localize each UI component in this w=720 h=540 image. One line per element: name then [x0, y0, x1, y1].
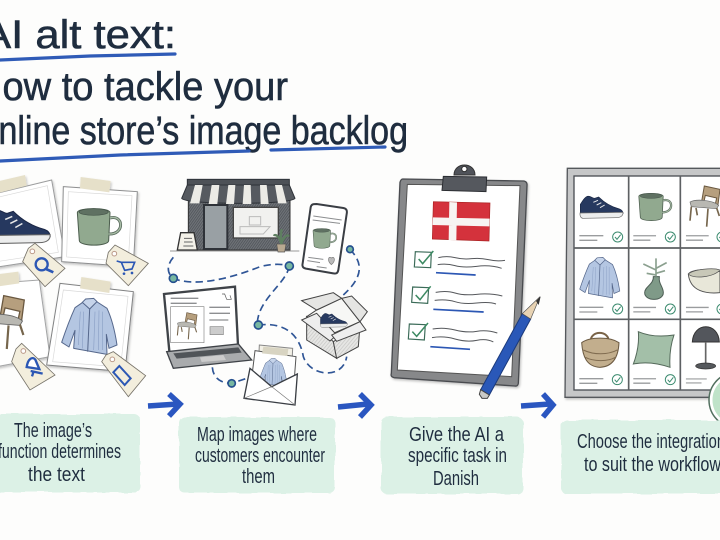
panel: customer touchpoints map	[164, 179, 367, 405]
caption lines and check marks	[579, 232, 720, 385]
icon: pencil	[479, 296, 541, 398]
dashed journey path	[168, 249, 359, 383]
caption: step three: Danish	[433, 468, 479, 490]
icon: open box	[302, 293, 367, 358]
checklist item three	[408, 323, 497, 349]
product: mug	[639, 193, 671, 221]
product: chair	[690, 186, 720, 227]
tag: cart icon	[106, 245, 148, 286]
arrow: step three to four	[521, 394, 553, 417]
caption: step two: them	[242, 466, 275, 488]
clipboard	[391, 179, 527, 386]
product: lamp	[692, 327, 719, 369]
product: shoe	[580, 196, 623, 218]
clip	[442, 165, 487, 192]
photo: mug	[62, 177, 137, 267]
icon: phone	[302, 204, 347, 274]
caption: step four	[561, 420, 720, 494]
arrow: step two to three	[338, 394, 371, 417]
tag: ruler icon	[102, 352, 146, 397]
photo: chair	[0, 272, 50, 367]
checklist item one	[414, 251, 505, 275]
caption: step two: Map images where	[197, 424, 317, 446]
caption: step one: the text	[28, 464, 85, 486]
product: basket	[582, 333, 619, 367]
caption: step one	[0, 414, 140, 492]
icon: laptop	[164, 287, 252, 368]
flag: Denmark	[432, 202, 490, 241]
icon: store	[170, 179, 299, 252]
arrow: step one to two	[148, 394, 180, 416]
caption: step one: The image’s	[14, 420, 92, 442]
grid frame	[565, 168, 720, 397]
photo: shirt	[47, 277, 133, 372]
title underlines	[0, 54, 385, 161]
caption: step three: specific task in	[408, 445, 507, 467]
tag: lamp icon	[12, 343, 55, 390]
caption: step one: function determines	[0, 441, 121, 463]
caption: step two	[179, 417, 335, 493]
photo: shoe	[0, 175, 65, 268]
product: cushion	[633, 332, 674, 367]
panel: image function photos	[0, 175, 148, 397]
caption: step two: customers encounter	[195, 445, 325, 467]
panel: product grid	[565, 168, 720, 397]
panel: clipboard task	[391, 165, 541, 398]
product: shirt	[580, 257, 620, 298]
tag: search icon	[23, 243, 65, 287]
checklist item two	[412, 286, 502, 312]
badge: green check	[709, 372, 720, 428]
route markers	[169, 246, 353, 387]
product: bowl	[688, 269, 720, 293]
title	[0, 13, 408, 161]
icon: envelope with shirt	[244, 345, 297, 405]
caption: step three: Give the AI a	[409, 424, 505, 446]
product: vase	[643, 258, 667, 299]
caption: step three	[381, 417, 523, 494]
